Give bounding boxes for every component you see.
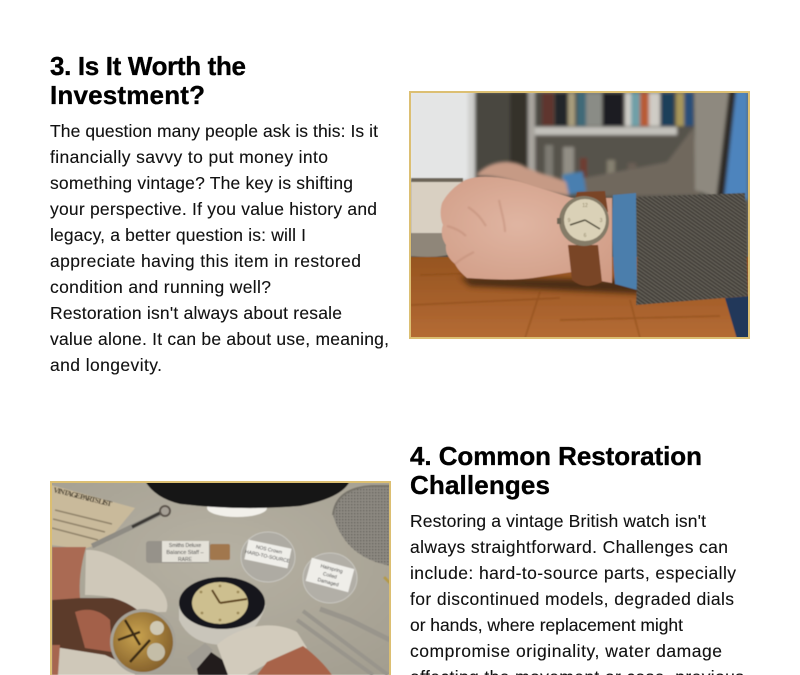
parts tub: NOS crown	[241, 532, 295, 582]
wristwatch: 6	[584, 233, 587, 239]
parts list paper	[51, 485, 135, 549]
rear arm in jacket	[477, 91, 748, 200]
rear hand	[477, 162, 569, 196]
text block: section 4 body: compromise originality, water damage	[410, 641, 722, 661]
screwdriver	[92, 506, 170, 546]
magnifier lamp	[145, 481, 350, 517]
coffee mug	[411, 178, 469, 257]
parts tub: hairspring	[303, 553, 357, 603]
photo: watchmaker's bench with parts	[50, 481, 391, 675]
fist	[441, 177, 612, 283]
vial: balance staff: RARE	[178, 557, 193, 563]
text block: section 3 body: your perspective. If you value history and	[50, 199, 377, 219]
heading: section 3	[50, 51, 246, 110]
wristwatch: 9	[568, 218, 571, 224]
watch dial on holder	[179, 577, 266, 645]
wristwatch	[557, 191, 609, 286]
cuff denim	[612, 193, 637, 290]
wristwatch: 3	[600, 218, 603, 224]
tweezers	[297, 577, 391, 675]
text block: section 3 body: appreciate having this item in restored	[50, 251, 361, 271]
text block: section 3 body: and longevity.	[50, 355, 162, 375]
text block: section 4 body	[410, 511, 744, 675]
vial: balance staff	[146, 541, 230, 563]
heading: section 4: Challenges	[410, 470, 550, 500]
text block: section 3 body: Restoration isn't always about resale	[50, 303, 342, 323]
heading: section 3: Investment?	[50, 80, 205, 110]
heading: section 4	[410, 441, 702, 500]
tweed sleeve	[636, 193, 748, 305]
text block: section 3 body	[50, 121, 389, 375]
text block: section 4 body: always straightforward. Challenges can	[410, 537, 728, 557]
text block: section 3 body: condition and running well?	[50, 277, 271, 297]
right hand with glove	[217, 625, 332, 675]
parts list paper: VINTAGE PARTS LIST	[53, 485, 113, 508]
text block: section 4 body: or hands, where replacement might	[410, 615, 683, 635]
text block: section 4 body: Restoring a vintage British watch isn't	[410, 511, 706, 531]
text block: section 3 body: something vintage? The key is shifting	[50, 173, 353, 193]
text block: section 4 body: for discontinued models, degraded dials	[410, 589, 734, 609]
text block: section 3 body: legacy, a better question is: will I	[50, 225, 306, 245]
text block: section 3 body: The question many people ask is this: Is it	[50, 121, 378, 141]
table	[409, 257, 750, 339]
background room	[409, 91, 750, 266]
photo: wrist with vintage watch	[409, 91, 750, 339]
gold frame	[410, 92, 749, 338]
vial: balance staff: Smiths Deluxe	[169, 543, 201, 549]
wristwatch: 12	[582, 203, 588, 209]
text block: section 3 body: value alone. It can be about use, meaning,	[50, 329, 389, 349]
text block: section 3 body: financially savvy to put money into	[50, 147, 328, 167]
heading: section 4: 4. Common Restoration	[410, 441, 702, 471]
vial: balance staff: Balance Staff –	[166, 550, 205, 556]
parts tub: hairspring: Hairspring	[320, 563, 344, 575]
parts tub: hairspring: Coiled	[322, 571, 338, 581]
text block: section 4 body: include: hard-to-source parts, especially	[410, 563, 736, 583]
parts tub: NOS crown: NOS Crown	[255, 544, 283, 556]
left hand with glove holding movement	[52, 547, 167, 675]
shadow under hand	[460, 277, 660, 295]
loupe	[187, 643, 245, 675]
books	[535, 93, 695, 181]
gold frame	[51, 482, 390, 675]
parts tub: hairspring: Damaged	[317, 577, 339, 588]
parts tub: NOS crown: HARD-TO-SOURCE	[244, 549, 291, 565]
mesh basket	[333, 486, 391, 566]
bench surface	[50, 481, 391, 675]
heading: section 3: 3. Is It Worth the	[50, 51, 246, 81]
movement	[110, 609, 176, 675]
